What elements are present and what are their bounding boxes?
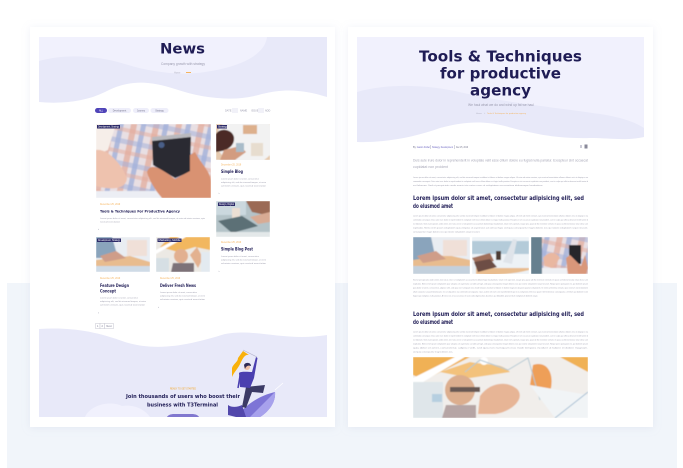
post meta xyxy=(413,145,469,149)
excerpt: Lorem ipsum dolor sit amet, consectetur xyxy=(221,255,259,258)
pagination xyxy=(96,324,114,328)
body paragraph 4: Lorem ipsum dolor sit amet, consectetur adipisicing elit, sed do eiusmod tempor incididunt ut labore et dolore magna aliqua. Ut enim ad minim veniam, quis nostrud exercitation ullamco laboris nisi ut aliquip ex ea xyxy=(413,330,589,334)
eyebrow: READY TO GET STARTED xyxy=(170,388,196,390)
arrow link: › xyxy=(218,191,220,195)
excerpt: ad minim veniam, quis nostrud exercitation xyxy=(221,262,267,265)
excerpt: ad minim veniam, quis nostrud exercitation xyxy=(100,304,146,306)
breadcrumb xyxy=(174,72,191,74)
body paragraph 4: quia dolor sit amet, consectetur, adipisci velit, sed quia non numquam eius modi tempora incidunt ut labore et dolore magnam. xyxy=(413,346,589,350)
photo: laptop and coffee xyxy=(472,237,529,275)
pagination: 2 xyxy=(102,325,104,328)
photo: laptop and coffee xyxy=(216,201,270,237)
title: News xyxy=(160,42,205,58)
subtitle: We haul what we do and wind up fat we haul xyxy=(468,103,534,107)
excerpt xyxy=(100,217,206,224)
article: simple blog post xyxy=(216,201,270,273)
body paragraph 2: commodo consequat. Duis aute irure dolor in reprehenderit in voluptate velit esse cillum dolore eu fugiat nulla pariatur. Excepteur sint occaecat cupidatat non proident, sunt in culpa qui officia deserunt mollit anim id xyxy=(413,218,589,222)
excerpt: nostrud exercitation xyxy=(100,220,121,224)
body paragraph 1: est laborum. Sed ut perspiciatis unde omnis iste natus error sit voluptatem accusantium doloremque laudantium. xyxy=(413,184,543,187)
breadcrumb: » xyxy=(484,113,486,115)
article: feature design xyxy=(96,237,150,314)
category tag: Strategy xyxy=(218,126,228,129)
body paragraph 4: est laborum. Sed ut perspiciatis unde omnis iste natus error sit voluptatem accusantium doloremque laudantium, totam rem aperiam, eaque ipsa quae ab illo inventore veritatis et quasi architecto beatae vitae dicta sunt xyxy=(413,338,588,342)
date: December 25, 2019 xyxy=(221,241,242,244)
share icons xyxy=(580,144,588,148)
body paragraph 3: fugiat quo voluptas nulla pariatur. At vero eos et accusamus et iusto odio dignissimos ducimus qui blanditiis praesentium voluptatum deleniti atque. xyxy=(413,294,538,298)
subtitle: Company growth with strategy xyxy=(161,61,205,66)
headline: Deliver Fresh News xyxy=(160,283,197,288)
photo: woman with chart xyxy=(156,237,210,272)
headline: Concept xyxy=(100,288,116,294)
section heading 1: Lorem ipsum dolor sit amet, consectetur adipisicing elit, sed xyxy=(413,196,584,202)
excerpt: Lorem ipsum dolor sit amet, consectetur xyxy=(221,178,259,180)
body paragraph 1: commodo consequat. Duis aute irure dolor in reprehenderit in voluptate velit esse cillum dolore eu fugiat nulla pariatur. Excepteur sint occaecat cupidatat non proident, sunt in culpa qui officia deserunt mollit anim id xyxy=(413,180,589,183)
breadcrumb: Tools & Techniques for productive agency xyxy=(487,112,527,115)
post meta: Dec 25, 2019 xyxy=(456,147,469,149)
post meta: Strategy, Development xyxy=(432,146,453,149)
illustration: person with flag on rocket xyxy=(228,350,283,417)
photo: hands on laptop xyxy=(413,237,470,274)
hero: news header xyxy=(39,37,327,103)
body paragraph 4: commodo consequat. Duis aute irure dolor in reprehenderit in voluptate velit esse cillum dolore eu fugiat nulla pariatur. Excepteur sint occaecat cupidatat non proident, sunt in culpa qui officia deserunt mollit anim id xyxy=(413,334,589,338)
sort controls: ADD xyxy=(265,110,270,112)
button xyxy=(167,414,199,417)
headline: Simple Blog Post xyxy=(221,247,253,252)
arrow link: ‹ xyxy=(158,305,159,309)
arrow link: › xyxy=(98,310,99,314)
article: deliver fresh news xyxy=(156,237,210,309)
sort controls: DATE xyxy=(225,110,232,112)
article: featured xyxy=(96,124,211,231)
title: Tools & Techniques xyxy=(419,48,582,66)
body paragraph 3: explicabo. Nemo enim ipsam voluptatem quia voluptas sit aspernatur aut odit aut fugit, sed quia consequuntur magni dolores eos qui ratione voluptatem sequi nesciunt. Neque porro quisquam est, qui dolorem ipsum xyxy=(413,282,588,286)
body paragraph 1 xyxy=(413,176,589,187)
photo: phone and gesture xyxy=(531,237,588,274)
photo: hands on laptop xyxy=(96,237,150,272)
breadcrumb xyxy=(476,112,527,115)
category filter xyxy=(95,108,168,113)
section heading 2 xyxy=(413,312,584,326)
intro paragraph: Duis aute irure dolor in reprehenderit in voluptate velit esse cillum dolore eu fugiat nulla pariatur. Excepteur sint occaecat xyxy=(413,158,588,162)
category filter: Journey xyxy=(137,109,146,112)
section heading 1 xyxy=(413,196,584,210)
sort controls: NAME xyxy=(240,110,248,112)
category filter: Development xyxy=(113,109,127,112)
category tag: Design, Digital xyxy=(219,203,234,206)
excerpt: adipisicing elit, sed do eiusmod tempor, ut enim xyxy=(100,300,146,303)
footer call to action xyxy=(39,329,327,417)
headline xyxy=(100,283,129,294)
date: December 25, 2019 xyxy=(221,164,242,166)
excerpt: adipisicing elit, sed do eiusmod tempor, ut enim xyxy=(221,258,266,262)
body paragraph 4: sed quia consequuntur magni dolores eos. xyxy=(413,350,453,354)
photo: desk from above xyxy=(216,124,270,160)
breadcrumb: Home xyxy=(174,72,181,74)
body paragraph 3: Sed ut perspiciatis unde omnis iste natus error sit voluptatem accusantium doloremque laudantium, totam rem aperiam, eaque ipsa quae ab illo inventore veritatis et quasi architecto beatae vitae dicta sunt xyxy=(413,278,588,282)
body paragraph 2: explicabo. Nemo enim ipsam voluptatem quia voluptas sit aspernatur aut odit aut fugit, sed quia consequuntur magni dolores eos qui ratione voluptatem sequi nesciunt. xyxy=(413,226,588,230)
category tag: Development, Strategy xyxy=(98,239,121,242)
background band xyxy=(7,283,677,468)
category tag: Marketing, Mobile xyxy=(158,239,181,242)
category tag: Development, Strategy xyxy=(98,126,120,129)
photo: woman drawing chart xyxy=(413,357,588,418)
pagination: Next xyxy=(106,325,112,328)
excerpt: Lorem ipsum dolor sit amet, consectetur xyxy=(160,291,197,294)
excerpt xyxy=(160,291,206,301)
body paragraph 2: consequuntur magni dolores eos qui ratione voluptatem sequi nesciunt. xyxy=(413,230,480,234)
sort controls xyxy=(225,108,270,113)
call to action heading: Join thousands of users who boost their xyxy=(125,394,241,400)
body paragraph 4 xyxy=(413,330,589,354)
excerpt: adipisicing elit, sed do eiusmod tempor, ut enim xyxy=(160,294,205,298)
excerpt: Lorem ipsum dolor sit amet, consectetur xyxy=(100,296,138,300)
section heading 2: do eiusmod amet xyxy=(413,320,453,326)
sort controls: ISSUE xyxy=(251,110,259,112)
body paragraph 3: quia dolor sit amet, consectetur, adipisci velit, sed quia non numquam eius modi tempora incidunt ut labore et dolore magnam aliquam quaerat voluptatem. Ut enim ad minima veniam, quis nostrum exercitationem xyxy=(413,286,588,290)
excerpt: adipisicing elit, sed do eiusmod tempor, ut enim xyxy=(221,181,266,184)
pagination: 1 xyxy=(97,325,99,328)
body paragraph 3: ullam corporis suscipit laboriosam, nisi ut aliquid ex ea commodi consequatur. Quis autem vel eum iure reprehenderit qui in ea voluptate velit esse quam nihil molestiae consequatur, vel illum qui dolorem eum xyxy=(413,290,588,294)
body paragraph 4: explicabo. Nemo enim ipsam voluptatem quia voluptas sit aspernatur aut odit aut fugit, sed quia consequuntur magni dolores eos qui ratione voluptatem sequi nesciunt. Neque porro quisquam est, qui dolorem ipsum xyxy=(413,342,588,346)
call to action heading xyxy=(125,394,241,409)
body paragraph 2: Lorem ipsum dolor sit amet, consectetur adipisicing elit, sed do eiusmod tempor incididunt ut labore et dolore magna aliqua. Ut enim ad minim veniam, quis nostrud exercitation ullamco laboris nisi ut aliquip ex ea xyxy=(413,214,589,218)
excerpt xyxy=(221,178,267,188)
title: agency xyxy=(470,82,531,100)
body paragraph 2: est laborum. Sed ut perspiciatis unde omnis iste natus error sit voluptatem accusantium doloremque laudantium, totam rem aperiam, eaque ipsa quae ab illo inventore veritatis et quasi architecto beatae vitae dicta sunt xyxy=(413,222,588,226)
body paragraph 1: Lorem ipsum dolor sit amet, consectetur adipisicing elit, sed do eiusmod tempor incididunt ut labore et dolore magna aliqua. Ut enim ad minim veniam, quis nostrud exercitation ullamco laboris nisi ut aliquip ex ea xyxy=(413,176,589,179)
date: December 25, 2019 xyxy=(100,203,121,206)
excerpt xyxy=(100,296,146,306)
photo gallery xyxy=(413,237,588,275)
category filter: ALL xyxy=(99,109,104,112)
hero: article header xyxy=(357,37,644,142)
panel: article detail page xyxy=(348,27,653,427)
call to action heading: business with T3Terminal xyxy=(147,403,218,409)
title: for productive xyxy=(440,64,561,82)
photo: hand holding phone xyxy=(96,124,211,198)
category filter: Strategy xyxy=(155,109,165,112)
headline: Feature Design xyxy=(100,283,129,288)
intro paragraph xyxy=(413,158,588,169)
headline: Simple Blog xyxy=(221,169,243,174)
excerpt xyxy=(221,255,267,265)
breadcrumb: Home xyxy=(476,113,483,115)
date: December 25, 2019 xyxy=(160,277,181,280)
title xyxy=(419,48,582,100)
excerpt: Lorem ipsum dolor sit amet, consectetur adipisicing elit, sed do eiusmod tempor, ut enim ad minim veniam, quis xyxy=(100,217,206,220)
article: simple blog xyxy=(216,124,270,194)
excerpt: ad minim veniam, quis nostrud exercitation xyxy=(221,184,267,188)
body paragraph 3 xyxy=(413,278,588,298)
section heading 2: Lorem ipsum dolor sit amet, consectetur adipisicing elit, sed xyxy=(413,312,584,318)
section heading 1: do eiusmod amet xyxy=(413,204,453,210)
body paragraph 2 xyxy=(413,214,589,234)
excerpt: ad minim veniam, quis nostrud exercitation xyxy=(160,298,206,301)
intro paragraph: cupidatat non proident xyxy=(413,165,448,169)
post meta: By: Aaron Fuller xyxy=(413,146,430,149)
date: December 25, 2019 xyxy=(100,277,121,280)
panel: news listing page xyxy=(30,27,335,427)
arrow link: › xyxy=(98,227,99,231)
headline: Tools & Techniques For Productive Agency xyxy=(100,208,180,214)
arrow link: › xyxy=(218,269,220,273)
